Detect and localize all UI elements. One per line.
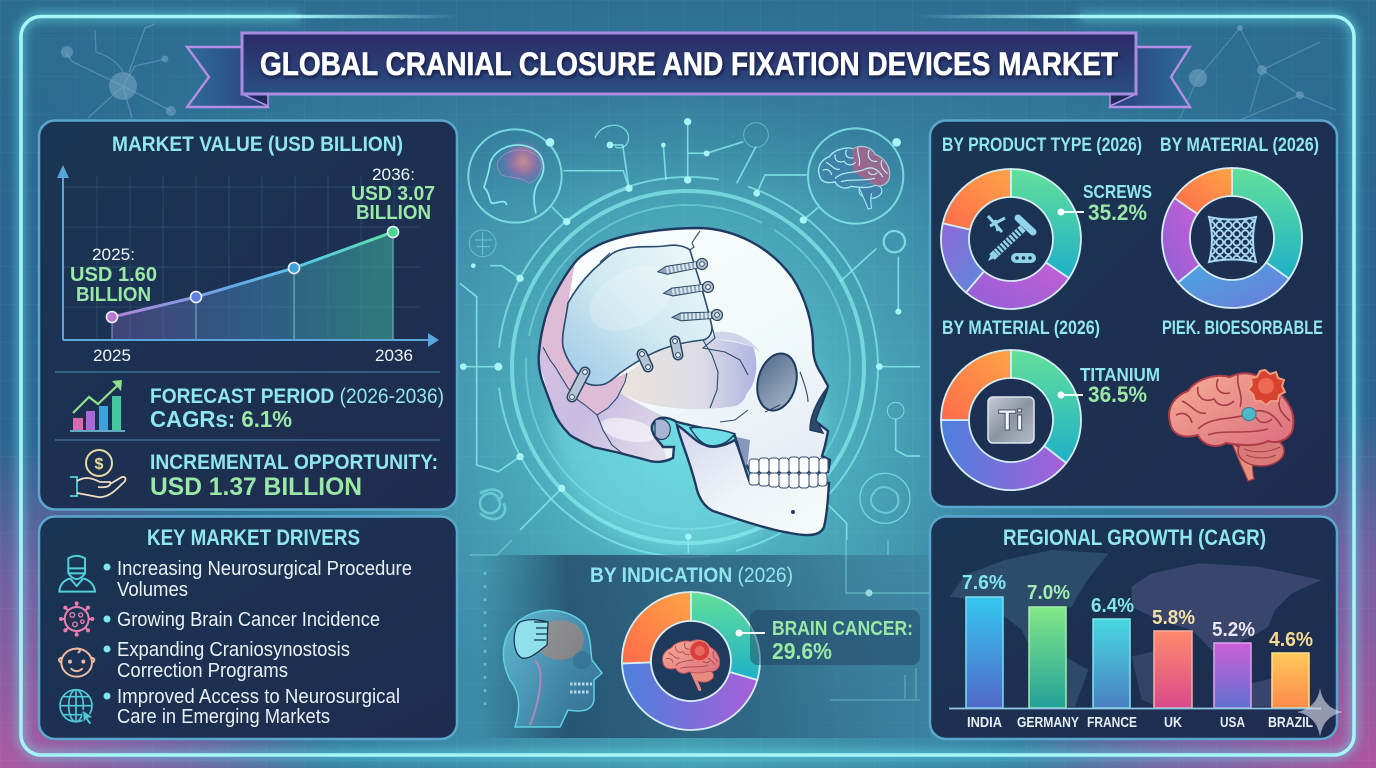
heading: by material top: BY MATERIAL (2026) [1160,134,1319,156]
bar: USA [1212,619,1255,731]
bar: USA: USA [1220,714,1245,731]
cranium [540,229,829,466]
bar: Brazil: BRAZIL [1268,714,1313,731]
line chart: market value 2025 to 2036: USD 3.07 [351,183,435,205]
heading: market value: MARKET VALUE (USD BILLION) [112,133,403,156]
heading: PEEK bioresorbable: PIEK. BIOESORBABLE [1162,317,1323,339]
jaw gap [690,427,735,446]
line chart: market value 2025 to 2036: 2036 [375,346,413,365]
panel: product type and material [930,120,1337,507]
callout: screws share: SCREWS [1083,181,1152,202]
icon: growth bars with arrow [70,380,125,431]
nasal opening [810,388,827,433]
donut: by material top [1162,168,1302,308]
line chart: market value 2025 to 2036: BILLION [76,284,151,306]
title ribbon [187,33,1190,107]
center circuit rings and connectors [460,118,920,557]
panel: market value [39,120,457,510]
icon: surgeon [59,556,95,592]
heading: by material lower: BY MATERIAL (2026) [942,317,1100,339]
heading: by product type: BY PRODUCT TYPE (2026) [942,134,1142,156]
screw 1 [657,258,708,277]
decorative network: top right [1180,25,1336,120]
icon: head with glowing brain [484,141,544,213]
donut: by product type [941,169,1081,309]
bar: India: 7.6% [962,572,1006,594]
world map backdrop [950,550,1322,707]
panel: key market drivers [39,516,457,739]
title: GLOBAL CRANIAL CLOSURE AND FIXATION DEVICES MARKET [260,46,1118,82]
driver 3: Expanding Craniosynostosis [117,639,350,661]
line chart: market value 2025 to 2036: 2036: [372,165,415,184]
callout: titanium share: TITANIUM [1080,364,1160,385]
heading: key market drivers: KEY MARKET DRIVERS [147,525,360,550]
callout: brain cancer share: BRAIN CANCER: [772,618,913,640]
line chart: market value 2025 to 2036 [57,165,439,365]
eye socket [752,349,802,415]
illustration: skull with fixation plates and screws [530,220,840,555]
callout: brain cancer share: 29.6% [772,638,832,664]
bar: India: INDIA [967,714,1002,731]
icon: hand holding coin [70,450,126,497]
bar: France: 6.4% [1091,595,1134,617]
line chart: market value 2025 to 2036: USD 1.60 [70,264,157,286]
driver 3 [104,639,350,682]
mastoid process [655,419,670,439]
bar: India [962,572,1006,731]
icon: baby face [59,649,94,677]
heading: by indication: BY INDICATION (2026) [590,564,793,587]
bar: UK: 5.8% [1152,607,1195,629]
driver 4 [104,686,400,728]
sutures and cracks [543,231,808,453]
driver 4: Care in Emerging Markets [117,706,330,728]
text: incremental opportunity: INCREMENTAL OPPORTUNITY: [150,451,438,474]
bar chart: regional CAGR [949,572,1321,731]
driver 1 [104,558,412,601]
icon: translucent head with cranial implant [503,610,602,727]
donut: by material lower [941,350,1081,490]
implant flap [563,245,712,385]
callout: screws share [1058,181,1152,225]
icon: cancer cell [59,601,94,637]
callout: screws share: 35.2% [1088,200,1147,225]
icon: titanium tile: Ti [998,405,1024,437]
mandible [677,425,829,535]
text: CAGR: CAGRs: 6.1% [150,406,292,432]
bar: Germany: 7.0% [1027,582,1070,604]
fixation plates [570,339,680,399]
line chart: market value 2025 to 2036: BILLION [356,202,431,224]
icon: screw and plate [988,216,1036,263]
bar: Brazil: 4.6% [1269,629,1313,651]
callout: titanium share: 36.5% [1088,382,1147,407]
bar: France: FRANCE [1087,714,1137,731]
icon: mesh implant [1209,217,1256,262]
panel: regional growth [930,516,1337,739]
icon: sparkle watermark [1297,688,1343,737]
panel: by indication band [470,540,1000,738]
line chart: market value 2025 to 2036: 2025: [92,245,135,264]
bar: Germany [1017,582,1079,731]
text: USD 1.37 billion: USD 1.37 BILLION [150,473,362,501]
bar: Brazil [1268,629,1313,731]
icon: brain with tumor [663,640,720,689]
donut: by indication [622,592,760,730]
icon: globe with cursor [60,690,93,725]
callout: brain cancer share [736,610,920,665]
screw 3 [672,309,723,323]
callout: titanium share [1058,364,1160,407]
screw 2 [663,281,714,299]
bar: Germany: GERMANY [1017,714,1079,731]
bar: UK [1152,607,1195,731]
heading: regional growth: REGIONAL GROWTH (CAGR) [1003,525,1266,550]
icon: hand holding coin: $ [95,456,104,473]
text: forecast period: FORECAST PERIOD (2026-2036) [150,385,444,408]
bar: France [1087,595,1137,731]
bar: UK: UK [1164,714,1182,731]
decorative network: top left [61,24,176,118]
bar: USA: 5.2% [1212,619,1255,641]
icon: brain with tumor and implant [1169,370,1293,481]
driver 1: Volumes [117,579,188,601]
driver 1: Increasing Neurosurgical Procedure [117,558,412,580]
teeth [749,457,828,488]
icon: titanium tile [988,397,1034,443]
driver 3: Correction Programs [117,660,288,682]
line chart: market value 2025 to 2036: 2025 [93,346,131,365]
icon: brain in circle [819,147,889,209]
driver 4: Improved Access to Neurosurgical [117,686,400,708]
driver 2: Growing Brain Cancer Incidence [117,609,380,631]
